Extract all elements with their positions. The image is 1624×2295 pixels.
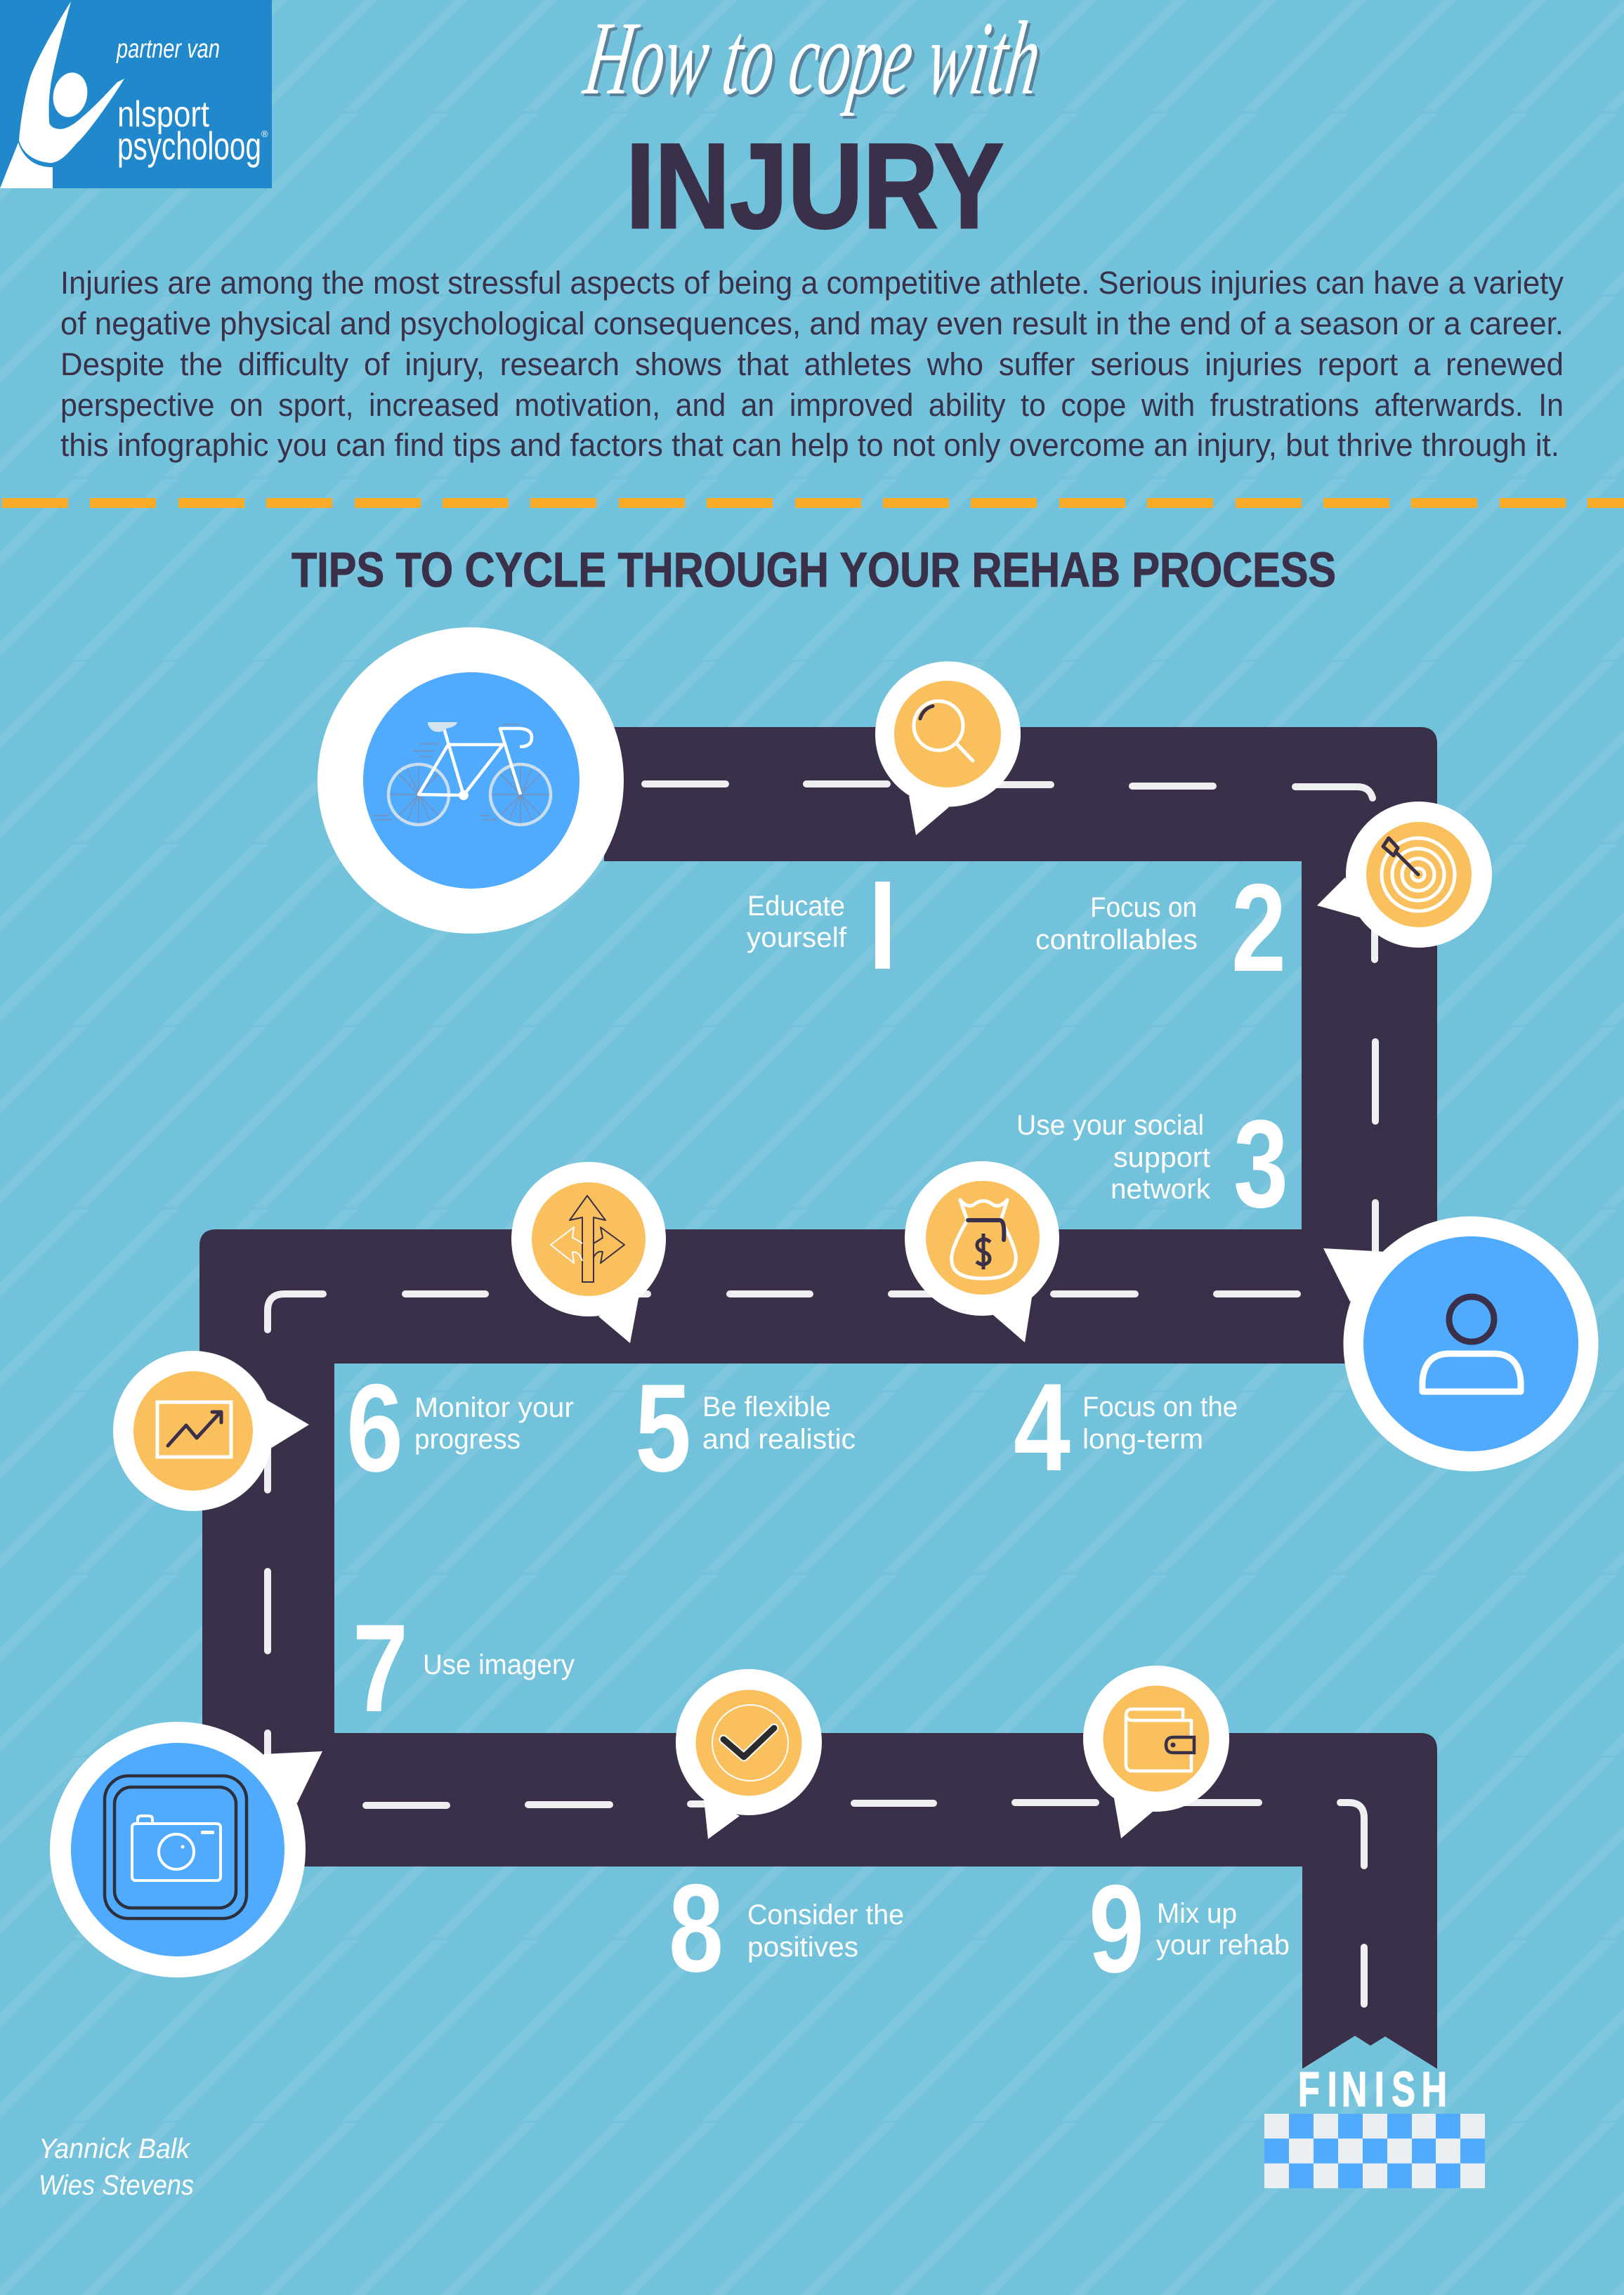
step 7: use imagery: Use imagery [423,1649,575,1680]
logo: nlsport psycholoog: nlsport [117,94,209,135]
authors: Wies Stevens [39,2170,194,2201]
icon: target with arrow [1382,838,1455,911]
step 5: be flexible and realistic: and realistic [702,1424,856,1455]
step 1: educate yourself: 1 [844,856,913,995]
step 4: focus on the long-term: Focus on the [1082,1392,1238,1423]
step 6: monitor your progress: progress [414,1424,520,1455]
intro paragraph: this infographic you can find tips and factors that can help to not only overcome an injury, but thrive through it. [60,427,1559,463]
title: How to cope with: How to cope with [580,3,1051,119]
icon: three-way arrows [551,1196,624,1282]
step 1: educate yourself: Educate [747,891,845,922]
step 5: be flexible and realistic: 5 [635,1358,691,1498]
pin 3: money bag [905,1161,1059,1342]
road [199,727,1437,2069]
step 8: consider the positives: positives [747,1932,858,1963]
title: How to cope with: How to cope with [577,0,1048,117]
step 5: be flexible and realistic: Be flexible [702,1392,831,1423]
step 2: focus on controllables: Focus on [1090,892,1197,923]
authors [39,2133,194,2201]
step 3: use your social support network: support [1113,1142,1210,1173]
step 9: mix up your rehab: Mix up [1157,1898,1237,1929]
step 4: focus on the long-term: 4 [1014,1357,1070,1497]
icon: line chart [157,1402,231,1457]
intro paragraph: perspective on sport, increased motivation, and an improved ability to cope with frustrations afterwards. In [60,387,1564,423]
step 1: educate yourself: yourself [747,922,847,953]
icon: camera [105,1776,247,1918]
step 5: be flexible and realistic [635,1358,856,1498]
goal circle: person [1323,1217,1599,1471]
logo: nlsport psycholoog: ® [261,129,268,139]
step 4: focus on the long-term [1014,1357,1238,1497]
step 1: educate yourself [747,882,890,969]
step 9: mix up your rehab: 9 [1089,1859,1144,1999]
icon: wallet [1126,1709,1194,1771]
icon: bicycle [373,722,551,825]
step 3: use your social support network: 3 [1233,1094,1288,1234]
step 3: use your social support network: Use your social [1016,1110,1204,1141]
step 7: use imagery [353,1598,575,1738]
road lane markings [268,784,1375,2004]
step 2: focus on controllables [1035,858,1286,998]
pin 1: magnifier [875,662,1021,835]
step 8: consider the positives: 8 [669,1858,723,1998]
step 6: monitor your progress: 6 [346,1358,403,1498]
intro paragraph [60,265,1564,463]
pin 8: check mark [676,1669,822,1839]
step 9: mix up your rehab [1089,1859,1290,1999]
authors: Yannick Balk [39,2133,191,2164]
title: How to cope with [577,0,1051,119]
logo: nlsport psycholoog [0,0,272,188]
logo: nlsport psycholoog: psycholoog [117,124,261,168]
step 7: use imagery: 7 [353,1598,408,1738]
step 6: monitor your progress [346,1358,574,1498]
step 8: consider the positives [669,1858,904,1998]
icon: check mark [712,1705,788,1781]
finish label: FINISH [1298,2062,1447,2117]
start circle: bicycle [317,627,624,934]
camera circle [50,1722,322,1977]
step 6: monitor your progress: Monitor your [414,1392,574,1423]
step 8: consider the positives: Consider the [747,1900,904,1930]
logo: nlsport psycholoog: partner van [116,34,220,64]
step 2: focus on controllables: controllables [1035,924,1198,955]
step 9: mix up your rehab: your rehab [1156,1930,1290,1961]
title: INJURY: INJURY [626,119,1004,254]
pin 5: arrows [511,1162,666,1343]
pin 9: wallet [1083,1666,1229,1838]
step 3: use your social support network [1016,1094,1288,1234]
step 3: use your social support network: network [1111,1174,1211,1205]
icon: money bag [952,1200,1016,1279]
step 2: focus on controllables: 2 [1231,858,1286,998]
intro paragraph: Despite the difficulty of injury, research shows that athletes who suffer serious injuries report a renewed [60,346,1564,382]
step 4: focus on the long-term: long-term [1082,1424,1203,1455]
pin 2: target [1317,802,1492,948]
icon: person [1422,1297,1521,1392]
icon: magnifier [914,701,973,761]
intro paragraph: of negative physical and psychological consequences, and may even result in the end of a season or a career. [60,306,1564,341]
intro paragraph: Injuries are among the most stressful aspects of being a competitive athlete. Serious injuries can have a variety [60,265,1564,301]
heading: tips to cycle: TIPS TO CYCLE THROUGH YOUR REHAB PROCESS [292,542,1336,597]
finish checkerboard [1264,2114,1485,2188]
pin 6: progress chart [113,1351,309,1511]
